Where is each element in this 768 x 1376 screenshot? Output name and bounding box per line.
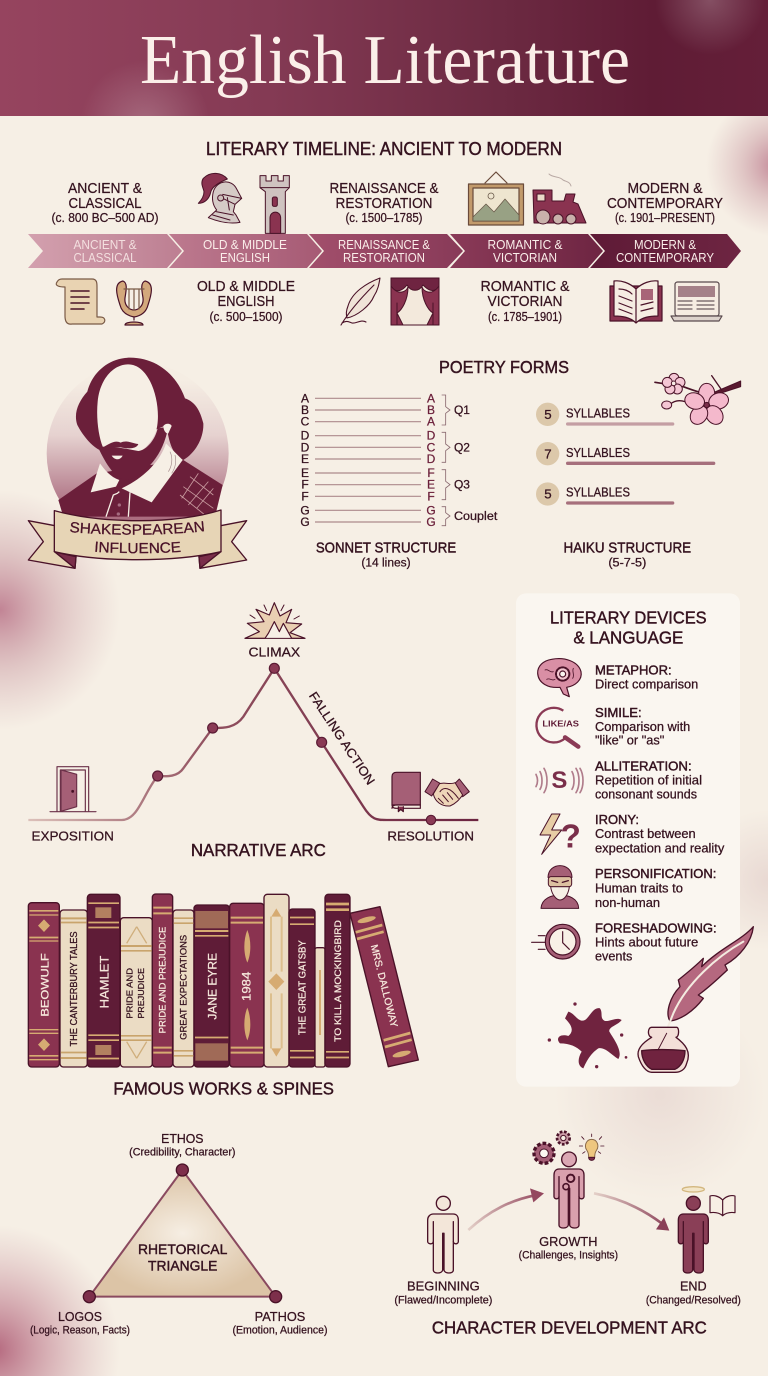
device descriptions: Repetition of initial bbox=[595, 773, 702, 787]
label: pathos: PATHOS bbox=[255, 1309, 305, 1324]
icon: magnifier simile bbox=[536, 708, 580, 747]
label: romantic and victorian: (c. 1785–1901) bbox=[488, 310, 562, 324]
spine titles: GREAT EXPECTATIONS bbox=[179, 935, 189, 1040]
device descriptions: Human traits to bbox=[595, 882, 683, 896]
icon: open book bbox=[610, 281, 662, 323]
sonnet line diagram: G bbox=[426, 515, 436, 529]
spine titles: PRIDE AND PREJUDICE bbox=[158, 927, 168, 1033]
icon: knight helmet bbox=[198, 173, 242, 223]
chevron band: CLASSICAL bbox=[74, 251, 137, 265]
icon: closed book bbox=[392, 772, 420, 812]
panel: literary timeline bbox=[28, 139, 741, 325]
haiku syllable rows: 5 bbox=[544, 487, 552, 502]
label: exposition: EXPOSITION bbox=[31, 829, 114, 844]
icon: brain and gear bbox=[538, 659, 581, 697]
label: ancient and classical: (c. 800 BC–500 AD) bbox=[52, 211, 158, 225]
device descriptions: Hints about future bbox=[595, 936, 698, 950]
gold bands and ornaments bbox=[29, 902, 412, 1061]
icon: open book bbox=[710, 1196, 735, 1216]
ribbon banner: SHAKESPEAREAN bbox=[70, 521, 204, 535]
label: ancient and classical: CLASSICAL bbox=[68, 195, 142, 212]
haiku syllable rows bbox=[536, 403, 715, 506]
panel: literary devices bbox=[516, 593, 753, 1087]
device descriptions: PERSONIFICATION: bbox=[595, 867, 716, 881]
sonnet line diagram bbox=[300, 391, 498, 529]
label: beginning bbox=[394, 1278, 492, 1307]
chevron band bbox=[28, 234, 741, 268]
title: English Literature bbox=[140, 22, 630, 99]
label: renaissance and restoration: RESTORATION bbox=[336, 195, 432, 212]
sonnet line diagram: E bbox=[301, 466, 309, 480]
chevron band: RENAISSANCE & bbox=[338, 238, 431, 252]
icon: irony bolt and question bbox=[540, 814, 581, 855]
label: beginning: BEGINNING bbox=[407, 1278, 480, 1293]
sonnet line diagram: B bbox=[427, 403, 435, 417]
icon: speeding clock bbox=[532, 924, 580, 959]
icon: feather quill bbox=[341, 278, 380, 325]
label: end: (Changed/Resolved) bbox=[646, 1295, 741, 1307]
label: pathos: (Emotion, Audience) bbox=[232, 1325, 327, 1337]
label: ethos: ETHOS bbox=[161, 1131, 204, 1146]
label: modern and contemporary: (c. 1901–PRESENT) bbox=[615, 211, 715, 225]
label: growth: (Challenges, Insights) bbox=[519, 1250, 618, 1262]
label: growth: GROWTH bbox=[539, 1234, 597, 1249]
sonnet line diagram: F bbox=[427, 489, 435, 503]
device descriptions: Comparison with bbox=[595, 720, 690, 734]
sonnet line diagram: G bbox=[426, 503, 436, 517]
devices heading: & LANGUAGE bbox=[573, 628, 683, 648]
sonnet line diagram: E bbox=[301, 452, 309, 466]
icon: scroll bbox=[56, 279, 105, 324]
label: renaissance and restoration bbox=[330, 180, 438, 225]
sonnet line diagram: Q2 bbox=[454, 440, 470, 454]
sonnet line diagram: Q3 bbox=[454, 478, 470, 492]
spine titles: MRS. DALLOWAY bbox=[368, 943, 399, 1029]
spine titles: PREJUDICE bbox=[136, 968, 146, 1019]
label: logos bbox=[30, 1309, 130, 1337]
icon: masked figure bbox=[541, 866, 579, 908]
label: modern and contemporary bbox=[607, 180, 723, 225]
icon: steam train bbox=[533, 174, 586, 224]
label: ethos: (Credibility, Character) bbox=[129, 1147, 235, 1159]
label: end bbox=[646, 1278, 741, 1307]
panel: shakespearean influence bbox=[28, 358, 248, 569]
panel: rhetorical triangle bbox=[30, 1131, 327, 1337]
character arc heading: CHARACTER DEVELOPMENT ARC bbox=[432, 1317, 707, 1337]
sonnet line diagram: C bbox=[301, 415, 310, 429]
spine titles: THE CANTERBURY TALES bbox=[69, 931, 80, 1046]
icon: irony bolt and question: ? bbox=[560, 818, 581, 855]
icon: theatre curtains bbox=[391, 278, 439, 325]
label: climax: CLIMAX bbox=[248, 645, 300, 660]
chevron band: MODERN & bbox=[634, 238, 697, 252]
label: logos: (Logic, Reason, Facts) bbox=[30, 1325, 130, 1337]
device descriptions: ALLITERATION: bbox=[595, 759, 692, 773]
poetry heading: POETRY FORMS bbox=[439, 357, 569, 377]
icon: framed landscape bbox=[468, 172, 524, 225]
triangle bbox=[89, 1170, 276, 1297]
haiku syllable rows: 5 bbox=[544, 407, 552, 422]
sonnet caption: SONNET STRUCTURE bbox=[316, 541, 456, 557]
sonnet line diagram: F bbox=[301, 489, 309, 503]
label: beginning: (Flawed/Incomplete) bbox=[394, 1295, 492, 1307]
device descriptions: SIMILE: bbox=[595, 706, 642, 720]
icon: lyre bbox=[117, 281, 151, 325]
haiku caption bbox=[563, 541, 691, 570]
chevron band: ROMANTIC & bbox=[488, 238, 563, 252]
sonnet line diagram: F bbox=[301, 478, 309, 492]
plot curve bbox=[28, 668, 478, 820]
figure: growth bbox=[554, 1152, 584, 1228]
devices heading: LITERARY DEVICES bbox=[550, 608, 707, 628]
triangle label: RHETORICAL bbox=[138, 1241, 228, 1257]
device descriptions: IRONY: bbox=[595, 813, 639, 827]
label: ancient and classical bbox=[52, 180, 158, 225]
label: renaissance and restoration: RENAISSANCE & bbox=[330, 180, 438, 197]
sonnet line diagram: A bbox=[427, 415, 435, 429]
label: falling action: FALLING ACTION bbox=[306, 689, 377, 787]
chevron band: ANCIENT & bbox=[74, 238, 137, 252]
sonnet line diagram: D bbox=[301, 429, 310, 443]
device descriptions bbox=[595, 664, 725, 964]
sonnet line diagram: E bbox=[427, 478, 435, 492]
triangle label: TRIANGLE bbox=[148, 1258, 217, 1274]
label: logos: LOGOS bbox=[58, 1309, 102, 1324]
haiku syllable rows: SYLLABLES bbox=[566, 446, 630, 460]
sonnet line diagram: Couplet bbox=[454, 509, 498, 523]
haiku syllable rows: SYLLABLES bbox=[566, 486, 630, 500]
book spines bbox=[28, 894, 418, 1067]
icon: climax burst bbox=[245, 603, 305, 638]
label: old and middle english bbox=[197, 278, 295, 324]
sonnet caption: (14 lines) bbox=[361, 556, 411, 570]
icon: laptop bbox=[671, 282, 722, 321]
sonnet line diagram: G bbox=[300, 515, 310, 529]
sonnet line diagram: A bbox=[301, 391, 309, 405]
device descriptions: events bbox=[595, 950, 632, 964]
icon: alliteration sound: S bbox=[551, 767, 567, 794]
panel: narrative arc bbox=[28, 603, 478, 860]
label: ancient and classical: ANCIENT & bbox=[68, 180, 142, 197]
icon: cherry blossom branch bbox=[655, 373, 741, 428]
figure: beginning bbox=[428, 1196, 458, 1273]
sonnet line diagram: D bbox=[301, 440, 310, 454]
icon: light bulb bbox=[579, 1134, 604, 1160]
sonnet line diagram: F bbox=[427, 466, 435, 480]
label: pathos bbox=[232, 1309, 327, 1337]
panel: poetry forms bbox=[300, 357, 741, 570]
chevron band: RESTORATION bbox=[343, 251, 425, 265]
spine titles: TO KILL A MOCKINGBIRD bbox=[333, 920, 343, 1042]
icon: inkwell and feather bbox=[638, 927, 753, 1072]
chevron band: ENGLISH bbox=[220, 251, 270, 265]
icon: gears bbox=[534, 1132, 570, 1163]
label: romantic and victorian: ROMANTIC & bbox=[480, 278, 570, 295]
sonnet line diagram: D bbox=[427, 452, 436, 466]
figure: end bbox=[678, 1187, 708, 1273]
haiku caption: HAIKU STRUCTURE bbox=[563, 541, 691, 557]
icon: magnifier simile: LIKE/AS bbox=[542, 720, 580, 729]
device descriptions: Direct comparison bbox=[595, 678, 698, 692]
sonnet line diagram: G bbox=[300, 503, 310, 517]
label: old and middle english: (c. 500–1500) bbox=[210, 310, 282, 324]
label: old and middle english: OLD & MIDDLE bbox=[197, 278, 295, 295]
haiku caption: (5-7-5) bbox=[608, 556, 646, 570]
sonnet line diagram: C bbox=[427, 440, 436, 454]
device descriptions: METAPHOR: bbox=[595, 664, 672, 678]
chevron band: VICTORIAN bbox=[493, 251, 557, 265]
ribbon banner bbox=[28, 509, 248, 569]
icon: ink splat bbox=[548, 1002, 627, 1068]
label: renaissance and restoration: (c. 1500–1785) bbox=[346, 211, 422, 225]
label: resolution: RESOLUTION bbox=[387, 829, 474, 844]
panel card bbox=[516, 593, 740, 1087]
triangle label bbox=[138, 1241, 228, 1274]
panel: famous works shelf bbox=[28, 894, 418, 1098]
spine titles: 1984 bbox=[240, 971, 254, 1001]
device descriptions: FORESHADOWING: bbox=[595, 921, 717, 935]
icon: open door bbox=[50, 767, 96, 812]
spine titles: JANE EYRE bbox=[206, 953, 220, 1020]
header banner bbox=[0, 0, 768, 116]
device descriptions: "like" or "as" bbox=[595, 733, 664, 747]
sonnet line diagram: B bbox=[301, 403, 309, 417]
icon: castle tower bbox=[260, 176, 289, 233]
arrow: beginning to growth bbox=[468, 1188, 544, 1230]
label: old and middle english: ENGLISH bbox=[218, 293, 274, 310]
sonnet line diagram: Q1 bbox=[454, 403, 470, 417]
label: end: END bbox=[680, 1278, 707, 1293]
device descriptions: Contrast between bbox=[595, 827, 696, 841]
chevron band: CONTEMPORARY bbox=[616, 251, 715, 265]
icon: alliteration sound bbox=[536, 767, 583, 794]
spine titles: HAMLET bbox=[97, 955, 111, 1008]
panel: character development arc bbox=[394, 1132, 741, 1337]
label: romantic and victorian bbox=[480, 278, 570, 324]
portrait medallion bbox=[47, 358, 229, 544]
label: ethos bbox=[129, 1131, 235, 1159]
device descriptions: consonant sounds bbox=[595, 787, 697, 801]
timeline heading: LITERARY TIMELINE: ANCIENT TO MODERN bbox=[206, 139, 562, 159]
haiku syllable rows: 7 bbox=[544, 446, 552, 461]
spine titles: THE GREAT GATSBY bbox=[297, 940, 308, 1035]
ribbon banner: INFLUENCE bbox=[95, 542, 181, 554]
haiku syllable rows: SYLLABLES bbox=[566, 406, 630, 420]
shelf heading: FAMOUS WORKS & SPINES bbox=[113, 1078, 334, 1098]
spine titles bbox=[39, 920, 399, 1046]
sonnet line diagram: A bbox=[427, 391, 435, 405]
narrative heading: NARRATIVE ARC bbox=[191, 840, 326, 860]
icon: handshake bbox=[425, 779, 469, 806]
devices heading bbox=[550, 608, 707, 648]
chevron band: OLD & MIDDLE bbox=[203, 238, 287, 252]
sonnet caption bbox=[316, 541, 456, 570]
label: modern and contemporary: CONTEMPORARY bbox=[607, 195, 723, 212]
arrow: growth to end bbox=[594, 1193, 669, 1231]
device descriptions: expectation and reality bbox=[595, 842, 725, 856]
vertices bbox=[83, 1164, 282, 1303]
sonnet line diagram: D bbox=[427, 429, 436, 443]
label: growth bbox=[519, 1234, 618, 1262]
label: modern and contemporary: MODERN & bbox=[628, 180, 702, 197]
device descriptions: non-human bbox=[595, 896, 660, 910]
plot points bbox=[153, 663, 436, 825]
spine titles: PRIDE AND bbox=[125, 968, 135, 1019]
spine titles: BEOWULF bbox=[39, 953, 51, 1017]
label: romantic and victorian: VICTORIAN bbox=[488, 293, 562, 310]
